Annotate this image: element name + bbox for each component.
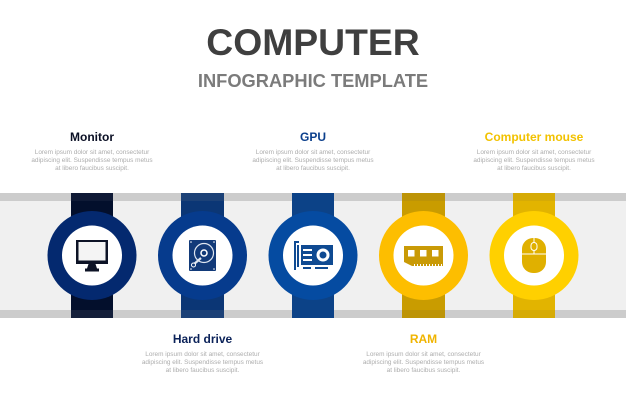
heading: RAM: RAM	[410, 332, 437, 346]
text: GPU description: Lorem ipsum dolor sit amet, consectetur	[256, 149, 370, 156]
light band	[0, 193, 626, 318]
text: Computer mouse description: adipiscing elit. Suspendisse tempus metus	[473, 157, 595, 164]
text: Monitor description	[31, 149, 153, 172]
column: monitor	[48, 193, 136, 318]
column: hard drive	[158, 193, 247, 318]
text: RAM description: adipiscing elit. Suspendisse tempus metus	[363, 359, 484, 366]
text: RAM description: at libero faucibus suscipit.	[387, 367, 460, 374]
text: Hard drive description: adipiscing elit. Suspendisse tempus metus	[142, 359, 263, 366]
heading: GPU: GPU	[300, 130, 326, 144]
subtitle: INFOGRAPHIC TEMPLATE	[198, 70, 428, 91]
text: GPU description: adipiscing elit. Suspendisse tempus metus	[252, 157, 374, 164]
heading: Hard drive: Hard drive	[173, 332, 232, 346]
text: Hard drive description: Lorem ipsum dolor sit amet, consectetur	[145, 351, 260, 358]
text: Computer mouse description: Lorem ipsum dolor sit amet, consectetur	[477, 149, 591, 156]
text: Monitor description: adipiscing elit. Suspendisse tempus metus	[31, 157, 153, 164]
text: RAM description: Lorem ipsum dolor sit amet, consectetur	[366, 351, 481, 358]
text: Computer mouse description	[473, 149, 595, 172]
icon: graphics card	[294, 241, 333, 270]
text: Monitor description: at libero faucibus suscipit.	[55, 165, 129, 172]
text: Computer mouse description: at libero faucibus suscipit.	[497, 165, 571, 172]
icon: computer mouse	[522, 238, 546, 273]
column: RAM	[379, 193, 468, 318]
column: mouse	[490, 193, 578, 318]
icon: RAM module	[404, 246, 443, 266]
text: GPU description: at libero faucibus suscipit.	[276, 165, 350, 172]
heading: Monitor: Monitor	[70, 130, 114, 144]
text: Hard drive description	[142, 351, 263, 374]
heading: Computer mouse: Computer mouse	[485, 130, 583, 144]
title: COMPUTER	[206, 21, 420, 63]
text: Monitor description: Lorem ipsum dolor sit amet, consectetur	[35, 149, 149, 156]
text: GPU description	[252, 149, 374, 172]
icon: monitor	[76, 240, 108, 272]
text: RAM description	[363, 351, 484, 374]
column: GPU	[268, 193, 358, 318]
icon: hard drive	[189, 240, 216, 271]
text: Hard drive description: at libero faucibus suscipit.	[166, 367, 239, 374]
